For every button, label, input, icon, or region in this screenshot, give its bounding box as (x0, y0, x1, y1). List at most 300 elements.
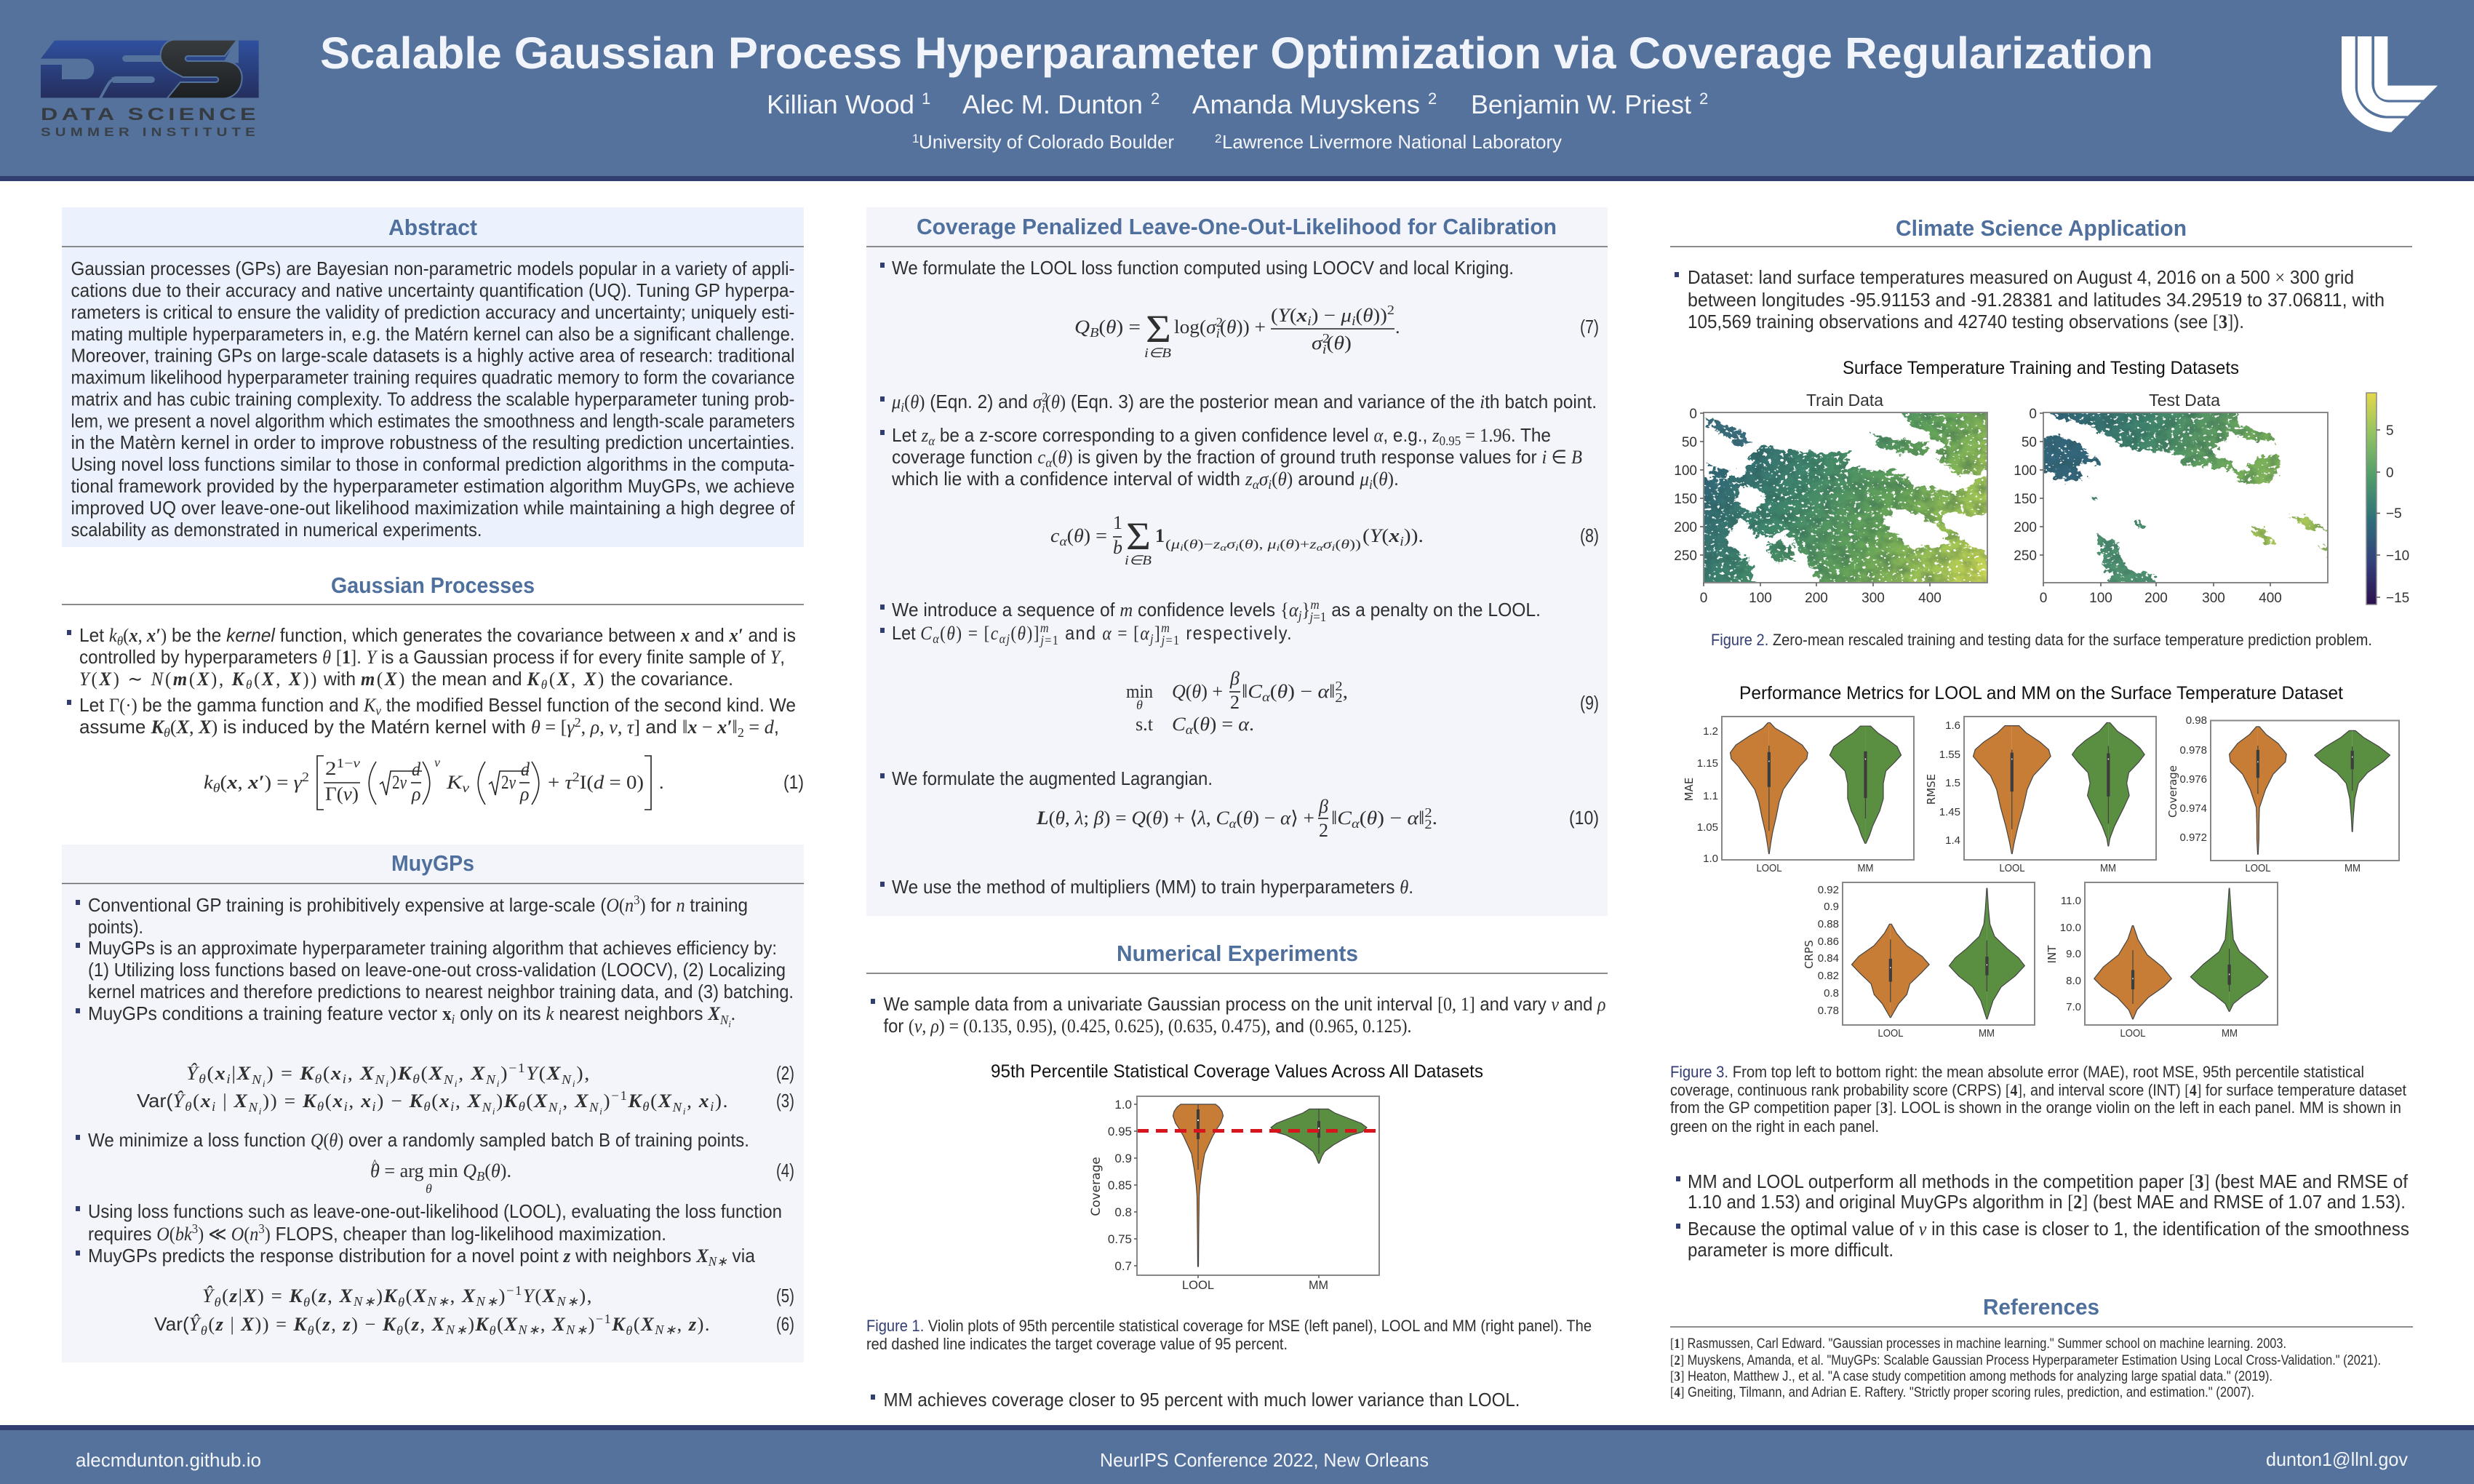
equation 8: i (1332, 542, 1336, 553)
heatmap: train data (1674, 391, 1999, 606)
text block: confidence level bullets: We introduce a sequence of m confidence levels {α (892, 599, 1298, 621)
equations 2 and 3: i (386, 1078, 390, 1089)
equation 7: ( (1220, 316, 1226, 338)
text block: results bullets: MM and LOOL outperform all methods in the competition paper [3] (best MAE and RMSE of (1688, 1170, 2409, 1192)
equation 8 (1050, 512, 1599, 567)
bullet: minimize loss: We minimize a loss function Q(θ) over a randomly sampled batch B of training points. (88, 1129, 749, 1151)
text block: loss evaluation bullets (88, 1200, 782, 1269)
text block: loss evaluation bullets: O(n (231, 1224, 259, 1245)
equation 9: ( (1270, 681, 1277, 702)
violin charts: performance metrics (1683, 714, 2399, 1040)
equations 2 and 3: ( (207, 1063, 215, 1084)
equations 5 and 6: N∗ (654, 1323, 677, 1337)
chart title: figure 3: Performance Metrics for LOOL and MM on the Surface Temperature Dataset (1739, 683, 2343, 703)
equations 2 and 3: −1 (508, 1061, 526, 1075)
text block: MuyGPs bullets: N (719, 1013, 729, 1027)
text block: confidence level bullets: j (1297, 608, 1302, 623)
equations 2 and 3: x (214, 1063, 226, 1084)
equations 5 and 6: θ (201, 1323, 208, 1338)
equations 2 and 3: x (330, 1063, 343, 1084)
equations 2 and 3: θ (412, 1072, 420, 1086)
axis labels: RMSE panel: 1.6 (1945, 719, 1960, 732)
equation 1: + τ (548, 772, 572, 793)
equation 1: ν (353, 756, 360, 770)
text block: Gaussian Processes bullets (79, 624, 796, 740)
equation 7 (1074, 303, 1599, 360)
equation 9: ( (1193, 714, 1200, 735)
equations 2 and 3: x (439, 1090, 450, 1112)
text block: confidence level bullets: =1 (1313, 610, 1326, 624)
axis labels: INT panel: 8.0 (2066, 975, 2081, 987)
text block: experiment setup: for (ν, ρ) = (0.135, 0.95), (0.425, 0.625), (0.635, 0.475), and (0.965, 0.125). (883, 1015, 1411, 1037)
text block: loss evaluation bullets: 3 (258, 1221, 265, 1236)
equations 5 and 6: X (461, 1285, 476, 1307)
equation 7: i (1322, 342, 1326, 356)
text block: Gaussian Processes bullets: θ (541, 677, 549, 692)
equations 2 and 3: ( (325, 1090, 332, 1112)
text block: Gaussian Processes bullets: X, X)) with m(X) the mean and K (262, 668, 542, 690)
text block: Gaussian Processes bullets: θ (164, 725, 170, 740)
logo: Lawrence Livermore National Laboratory (2342, 36, 2438, 132)
affiliations: Lawrence Livermore National Laboratory (1222, 131, 1562, 153)
text block: dataset description (1688, 266, 2385, 332)
equations 2 and 3: , (348, 1063, 360, 1084)
text block: reference list: [2] Muyskens, Amanda, et al. "MuyGPs: Scalable Gaussian Process Hyperparameter Estimation Using Local Cross-Validation." (2021). (1670, 1353, 2381, 1368)
text block: coverage function bullets: α (1045, 455, 1053, 470)
text block: coverage function bullets: . The (1511, 424, 1554, 446)
equations 5 and 6: θ (308, 1323, 315, 1338)
authors: 2 (1151, 89, 1160, 108)
equation 8: α (1059, 534, 1067, 548)
equation 1 (204, 755, 804, 810)
heatmap: test data: 50 (2022, 435, 2037, 450)
axis labels: MAE panel: 1.05 (1697, 821, 1718, 834)
equations 2 and 3: (X (539, 1063, 560, 1084)
equation 9: s.t (1136, 714, 1154, 735)
heatmap: train data: 150 (1674, 492, 1697, 507)
colorbar: −10 (2386, 548, 2409, 564)
equation 8: i (1235, 542, 1239, 553)
text block: abstract body: Gaussian processes (GPs) are Bayesian non-parametric models popular in a variety of appli- (71, 258, 794, 279)
equation 4: B (476, 1169, 484, 1184)
axis labels: CRPS panel: 0.88 (1818, 918, 1839, 930)
heatmap: train data: 400 (1918, 591, 1942, 606)
equation 8: ( (1335, 537, 1341, 552)
axis labels: CRPS panel: 0.82 (1818, 970, 1839, 982)
equation 9: α (1262, 690, 1270, 704)
axis labels: CRPS panel: 0.9 (1824, 901, 1839, 913)
text block: confidence level bullets: m (1161, 621, 1170, 635)
equation 7: Σ (1146, 307, 1171, 351)
equations 2 and 3: ) = (266, 1063, 300, 1084)
axis labels: RMSE panel: 1.45 (1939, 806, 1960, 818)
text block: Gaussian Processes bullets: ( (123, 625, 129, 646)
equation 9: Q(θ) + (1172, 681, 1223, 702)
text block: MuyGPs bullets: MuyGPs conditions a training feature vector x (88, 1002, 455, 1024)
equation 7: ( (1326, 332, 1333, 354)
equations 2 and 3: Y (526, 1063, 540, 1084)
equations 2 and 3: x (360, 1090, 372, 1112)
axis labels: RMSE panel: 1.55 (1939, 749, 1960, 761)
axis labels: CRPS panel: 0.86 (1818, 936, 1839, 948)
equations 2 and 3: x (332, 1090, 344, 1112)
equations 5 and 6: z | X)) = K (216, 1314, 307, 1335)
equations 5 and 6 (154, 1283, 794, 1338)
equations 2 and 3: i (492, 1106, 496, 1117)
text block: Gaussian Processes bullets: 2 (575, 715, 581, 730)
equations 5 and 6: , (450, 1285, 462, 1307)
equations 2 and 3: −1 (611, 1088, 628, 1103)
text block: confidence level bullets: respectively. (1181, 622, 1293, 644)
text block: loss evaluation bullets: requires O(bk (88, 1223, 193, 1245)
equation 9: 2 (1335, 690, 1343, 705)
text block: abstract body: in the Matèrn kernel in order to improve robustness of the resulting prediction uncertainties. (71, 431, 794, 453)
equations 2 and 3: K (299, 1063, 315, 1084)
violin chart: coverage across datasets: 0.9 (1114, 1152, 1132, 1165)
equation 10: 2 (1424, 817, 1432, 831)
equation 10: . (1432, 807, 1437, 829)
equation 8: b (1113, 537, 1122, 558)
text block: loss evaluation bullets: FLOPS, cheaper than log-likelihood maximization. (276, 1223, 695, 1245)
bullet: method of multipliers: We use the method of multipliers (MM) to train hyperparameters θ. (892, 876, 1413, 898)
text block: reference list (1670, 1336, 2381, 1400)
equation 1: 2ν (501, 772, 516, 793)
heading: MuyGPs: MuyGPs (391, 850, 474, 876)
equations 5 and 6: ( (406, 1285, 413, 1307)
panel: Coverage Penalized Leave-One-Out-Likelihood (866, 207, 1608, 916)
equation 8: i (1276, 542, 1280, 553)
equation 8: (8) (1580, 524, 1599, 546)
equations 2 and 3: X (359, 1063, 375, 1084)
equation 7: . (1395, 316, 1400, 338)
text block: dataset description: 105,569 training observations and 42740 testing observations (see [3]). (1688, 311, 2244, 332)
equations 5 and 6: z, X (319, 1285, 353, 1307)
equations 2 and 3: X (470, 1063, 486, 1084)
equations 2 and 3: i (343, 1072, 348, 1086)
affiliations: University of Colorado Boulder (919, 131, 1174, 153)
equation 1: I( (580, 772, 594, 793)
equation 8: σ (1226, 537, 1237, 551)
text block: MuyGPs bullets: (1) Utilizing loss functions based on leave-one-out cross-validation (LOOCV), (2) Localizing (88, 959, 786, 981)
equation 4: θ (426, 1181, 432, 1196)
heading: abstract: Abstract (388, 215, 477, 240)
equation 1: 2 (325, 758, 337, 779)
text block: confidence level bullets: m (1040, 621, 1050, 635)
equations 2 and 3: K (627, 1090, 642, 1112)
equation 8: ( (1239, 537, 1245, 552)
violin: LOOL (1173, 1104, 1224, 1266)
equation 9: 2 (1335, 679, 1343, 693)
text block: coverage function bullets: α, e.g., z (1374, 424, 1440, 446)
equation 4: θ). (491, 1160, 511, 1181)
heatmap: test data (2014, 391, 2330, 606)
text block: Gaussian Processes bullets: ( (170, 717, 177, 738)
equation 1: ( (220, 772, 227, 793)
text block: confidence level bullets: θ) = [c (946, 623, 1000, 644)
equations 5 and 6: ( (634, 1314, 641, 1335)
axis labels: MAE panel: 1.2 (1703, 725, 1718, 738)
equations 5 and 6: N∗ (565, 1323, 588, 1337)
logo: Data Science Summer Institute: DATA SCIENCE (41, 105, 260, 124)
text block: Gaussian Processes bullets: 2 (738, 725, 744, 740)
text block: confidence level bullets: =1 (1045, 633, 1059, 647)
text block: confidence level bullets: αj (999, 631, 1010, 646)
equations 2 and 3: θ (315, 1072, 323, 1086)
equations 2 and 3: K (409, 1090, 424, 1112)
text block: abstract body: matrix and has cubic training complexity. To address the scalable hyperparameter tuning prob- (71, 388, 794, 410)
equation 8: ( (1067, 525, 1074, 546)
equations 2 and 3: ( (420, 1063, 429, 1084)
equation 8: i∈B (1125, 553, 1152, 567)
equation 9: α (1186, 722, 1194, 737)
text block: reference list: [3] Heaton, Matthew J., et al. "A case study competition among methods for analyzing large spatial data." (2019). (1670, 1369, 2273, 1384)
equation 8: θ)+ z (1285, 537, 1314, 551)
equation 9: min (1126, 681, 1153, 702)
heatmap: test data: 100 (2089, 591, 2112, 606)
equations 2 and 3: ) (390, 1063, 398, 1084)
equations 2 and 3: ), (576, 1063, 591, 1084)
equation 8: i (1400, 534, 1404, 548)
text block: MuyGPs bullets: points). (88, 916, 143, 938)
authors: Benjamin W. Priest (1471, 89, 1691, 119)
heading: References: References (1983, 1294, 2099, 1320)
authors: Killian Wood (767, 89, 914, 119)
text block: results bullets: parameter is more difficult. (1688, 1239, 1894, 1261)
panel: References (1670, 1294, 2413, 1400)
equation 7: ( (1356, 305, 1362, 326)
text block: coverage function bullets: θ) is given by the fraction of ground truth response values for i ∈ B (1058, 446, 1583, 468)
axis labels: INT panel: 9.0 (2066, 948, 2081, 960)
axis labels: MAE panel: MAE (1683, 778, 1696, 801)
equations 2 and 3: X (574, 1090, 589, 1112)
equations 5 and 6: ) (376, 1285, 384, 1307)
text block: confidence level bullets: θ)] (1018, 623, 1042, 644)
axis labels: INT panel: 10.0 (2060, 922, 2081, 934)
equations 5 and 6: K (475, 1314, 490, 1335)
text block: loss evaluation bullets: N∗ (708, 1254, 727, 1269)
equations 2 and 3: i (497, 1078, 500, 1089)
equation 10: β (1318, 796, 1328, 817)
equations 5 and 6: N∗ (517, 1323, 540, 1337)
equation 7: θ)) (1362, 305, 1386, 326)
violin chart: coverage across datasets: Coverage (1089, 1157, 1104, 1216)
equation 9 (1126, 668, 1599, 737)
equation 10: θ) − α‖ (1367, 807, 1424, 829)
text block: confidence level bullets: m (1310, 597, 1320, 612)
equations 2 and 3: i (559, 1106, 562, 1117)
equations 2 and 3: Ŷ (186, 1063, 199, 1084)
text block: coverage function bullets: ( (1373, 468, 1378, 490)
equations 5 and 6: z, z) − K (322, 1314, 396, 1335)
equation 7: (7) (1580, 316, 1599, 338)
colorbar (2366, 393, 2409, 606)
equation 10: θ) − α⟩ + (1243, 807, 1314, 829)
axis labels: Coverage panel: Coverage (2166, 765, 2179, 818)
equations 5 and 6: K (383, 1285, 398, 1307)
equation 7: i∈B (1144, 346, 1171, 360)
text block: confidence level bullets: =1 (1165, 633, 1181, 647)
equations 2 and 3: ( (323, 1063, 331, 1084)
text block: Gaussian Processes bullets: assume K (79, 716, 164, 738)
equation 1: ρ (411, 783, 420, 805)
authors: 1 (922, 89, 930, 108)
axis labels: RMSE panel: LOOL (1999, 862, 2025, 874)
equations 2 and 3: i (450, 1099, 455, 1114)
footer: email: dunton1@llnl.gov (2266, 1448, 2408, 1470)
text block: coverage function bullets: coverage function c (892, 446, 1046, 468)
equations 2 and 3: ( (526, 1090, 534, 1112)
heatmap: train data: 200 (1805, 591, 1828, 606)
equations 2 and 3: i (344, 1099, 348, 1114)
equations 2 and 3: i (710, 1099, 715, 1114)
text block: Gaussian Processes bullets: θ (246, 677, 254, 692)
text block: MuyGPs bullets: 3 (634, 893, 640, 907)
equations 2 and 3: , (562, 1090, 575, 1112)
caption: figure 3: Figure 3. From top left to bottom right: the mean absolute error (MAE), root MSE, 95th percentile statistical (1670, 1063, 2364, 1081)
text block: results bullets (1688, 1170, 2409, 1261)
equations 2 and 3: i (263, 1078, 266, 1089)
chart title: figure 2: Surface Temperature Training and Testing Datasets (1843, 358, 2239, 378)
heading: Numerical Experiments: Numerical Experiments (1117, 941, 1358, 966)
equations 2 and 3: N (671, 1100, 683, 1114)
panel: Climate Science Application (1670, 215, 2412, 1261)
text block: MuyGPs bullets: only on its (455, 1002, 546, 1024)
caption: figure 3: coverage, continuous rank probability score (CRPS) [4], and interval score (INT) [4] for surface temperature dataset (1670, 1081, 2406, 1099)
axis labels: CRPS panel (1803, 884, 1995, 1040)
equations 2 and 3: X (428, 1063, 444, 1084)
text block: MuyGPs bullets: i (451, 1012, 455, 1026)
heatmap: test data: 150 (2014, 492, 2037, 507)
equations 2 and 3: θ (642, 1099, 650, 1114)
axis labels: CRPS panel: MM (1979, 1027, 1995, 1040)
heatmap: train data: Train Data (1806, 391, 1883, 410)
equation 9: C (1172, 714, 1186, 735)
text block: coverage function bullets: = 1.96 (1461, 425, 1511, 446)
equation 9: β (1229, 668, 1240, 689)
axis labels: CRPS panel: LOOL (1878, 1027, 1903, 1040)
colorbar: −15 (2386, 591, 2409, 606)
heatmap: train data: 100 (1674, 463, 1697, 479)
equations 5 and 6: ), (579, 1285, 593, 1307)
equation 1: K (446, 772, 463, 793)
equations 5 and 6: (5) (776, 1285, 794, 1307)
axis labels: CRPS panel: CRPS (1803, 940, 1816, 969)
equations 5 and 6: ( (222, 1285, 230, 1307)
equations 5 and 6: N∗ (445, 1323, 468, 1337)
equation 7: μ (1340, 305, 1352, 326)
text block: MuyGPs bullets: kernel matrices and therefore predictions to nearest neighbor training data, and (3) batching. (88, 981, 794, 1002)
text block: MuyGPs bullets: i (728, 1018, 731, 1029)
equations 2 and 3: θ (423, 1099, 431, 1114)
equation 8: σ (1323, 537, 1333, 551)
text block: confidence level bullets: j (1149, 631, 1154, 646)
bullet: LOOL loss: We formulate the LOOL loss function computed using LOOCV and local Kriging. (892, 257, 1514, 279)
equations 2 and 3: | (231, 1063, 237, 1084)
text block: Gaussian Processes bullets: d, (765, 716, 779, 738)
footer band (0, 1425, 2474, 1484)
equations 5 and 6: X (640, 1314, 655, 1335)
equation 10: 2 (1319, 820, 1328, 841)
equations 2 and 3: i (212, 1099, 217, 1114)
equations 5 and 6: N∗ (475, 1294, 499, 1309)
text block: abstract body: scalability as demonstrated in numerical experiments. (71, 519, 482, 540)
axis labels: INT panel: LOOL (2120, 1027, 2146, 1040)
equation 7: 2 (1216, 315, 1223, 330)
text block: confidence level bullets: α (933, 631, 940, 646)
equations 2 and 3: N (588, 1100, 599, 1114)
equations 5 and 6: ) (468, 1314, 476, 1335)
violin chart: coverage across datasets: 0.8 (1114, 1205, 1132, 1219)
heatmap: train data: 200 (1674, 520, 1697, 535)
axis labels: RMSE panel (1925, 719, 2116, 874)
equation 7: σ (1312, 332, 1323, 354)
text block: confidence level bullets: ( (940, 623, 946, 644)
text block: coverage function bullets: be a z-score corresponding to a given confidence level (935, 424, 1374, 446)
equations 2 and 3: θ (519, 1099, 526, 1114)
equations 5 and 6: θ (396, 1323, 404, 1338)
heading: Gaussian Processes: Gaussian Processes (331, 573, 535, 598)
equations 5 and 6: θ (303, 1295, 311, 1309)
equation 7: ) − (1312, 305, 1341, 326)
equations 2 and 3: i (683, 1106, 687, 1117)
axis labels: INT panel: 11.0 (2061, 895, 2081, 907)
axis labels: RMSE panel: 1.4 (1945, 834, 1960, 847)
caption: figure 3 (1670, 1063, 2406, 1136)
text block: coverage function bullets: θ) (Eqn. 2) and σ (910, 391, 1042, 412)
text block: confidence level bullets: j (1309, 610, 1313, 624)
bullet: MM achieves coverage: MM achieves coverage closer to 95 percent with much lower variance than LOOL. (883, 1389, 1520, 1411)
text block: coverage function bullets: θ) (Eqn. 3) are the posterior mean and variance of the ith batch point. (1051, 391, 1603, 412)
equations 5 and 6: , (540, 1314, 552, 1335)
text block: MuyGPs bullets: . (731, 1003, 735, 1024)
axis labels: Coverage panel: MM (2345, 862, 2361, 874)
text block: Gaussian Processes bullets: Let Γ(·) be the gamma function and K (79, 694, 376, 716)
equations 2 and 3: (2) (776, 1062, 794, 1084)
text block: loss evaluation bullets: via (727, 1245, 756, 1266)
heatmap: test data: 400 (2259, 591, 2282, 606)
violins: Coverage (2230, 727, 2390, 854)
axis labels: CRPS panel: 0.92 (1818, 884, 1839, 896)
equations 2 and 3: ( (650, 1090, 658, 1112)
heatmap: train data: 250 (1674, 548, 1697, 564)
equation 7: i (1216, 326, 1220, 340)
text block: loss evaluation bullets: ) (265, 1224, 271, 1245)
text block: Gaussian Processes bullets: = (744, 717, 765, 738)
equation 8: (Y(x (1362, 525, 1398, 546)
text block: coverage function bullets: σ (1259, 468, 1269, 490)
text block: abstract body (71, 258, 795, 540)
text block: results bullets: Because the optimal value of ν in this case is closer to 1, the identification of the smoothness (1688, 1218, 2409, 1240)
equation 10: ( (1237, 807, 1243, 829)
equations 5 and 6: z). (689, 1314, 711, 1335)
heatmap: test data: 200 (2144, 591, 2168, 606)
text block: MuyGPs bullets: MuyGPs is an approximate hyperparameter training algorithm that achieves efficiency by: (88, 937, 777, 959)
equation 1: (1) (783, 771, 804, 793)
equation 1: . (659, 772, 663, 793)
equations 5 and 6: ( (315, 1314, 322, 1335)
target coverage line (1137, 1129, 1377, 1133)
text block: coverage function bullets: α (1253, 477, 1259, 492)
equations 2 and 3: N (548, 1100, 559, 1114)
text block: abstract body: Using novel loss functions similar to those in conformal prediction algorithms in the computa- (71, 453, 794, 475)
text block: coverage function bullets: α (928, 434, 935, 448)
text block: confidence level bullets: α = [α (1102, 623, 1151, 644)
text block: coverage function bullets: i (1042, 401, 1045, 415)
equations 2 and 3: N (443, 1072, 455, 1087)
equation 7: ( (1098, 316, 1106, 338)
heatmap: train data: 300 (1862, 591, 1885, 606)
equation 8: θ)− z (1189, 537, 1218, 551)
